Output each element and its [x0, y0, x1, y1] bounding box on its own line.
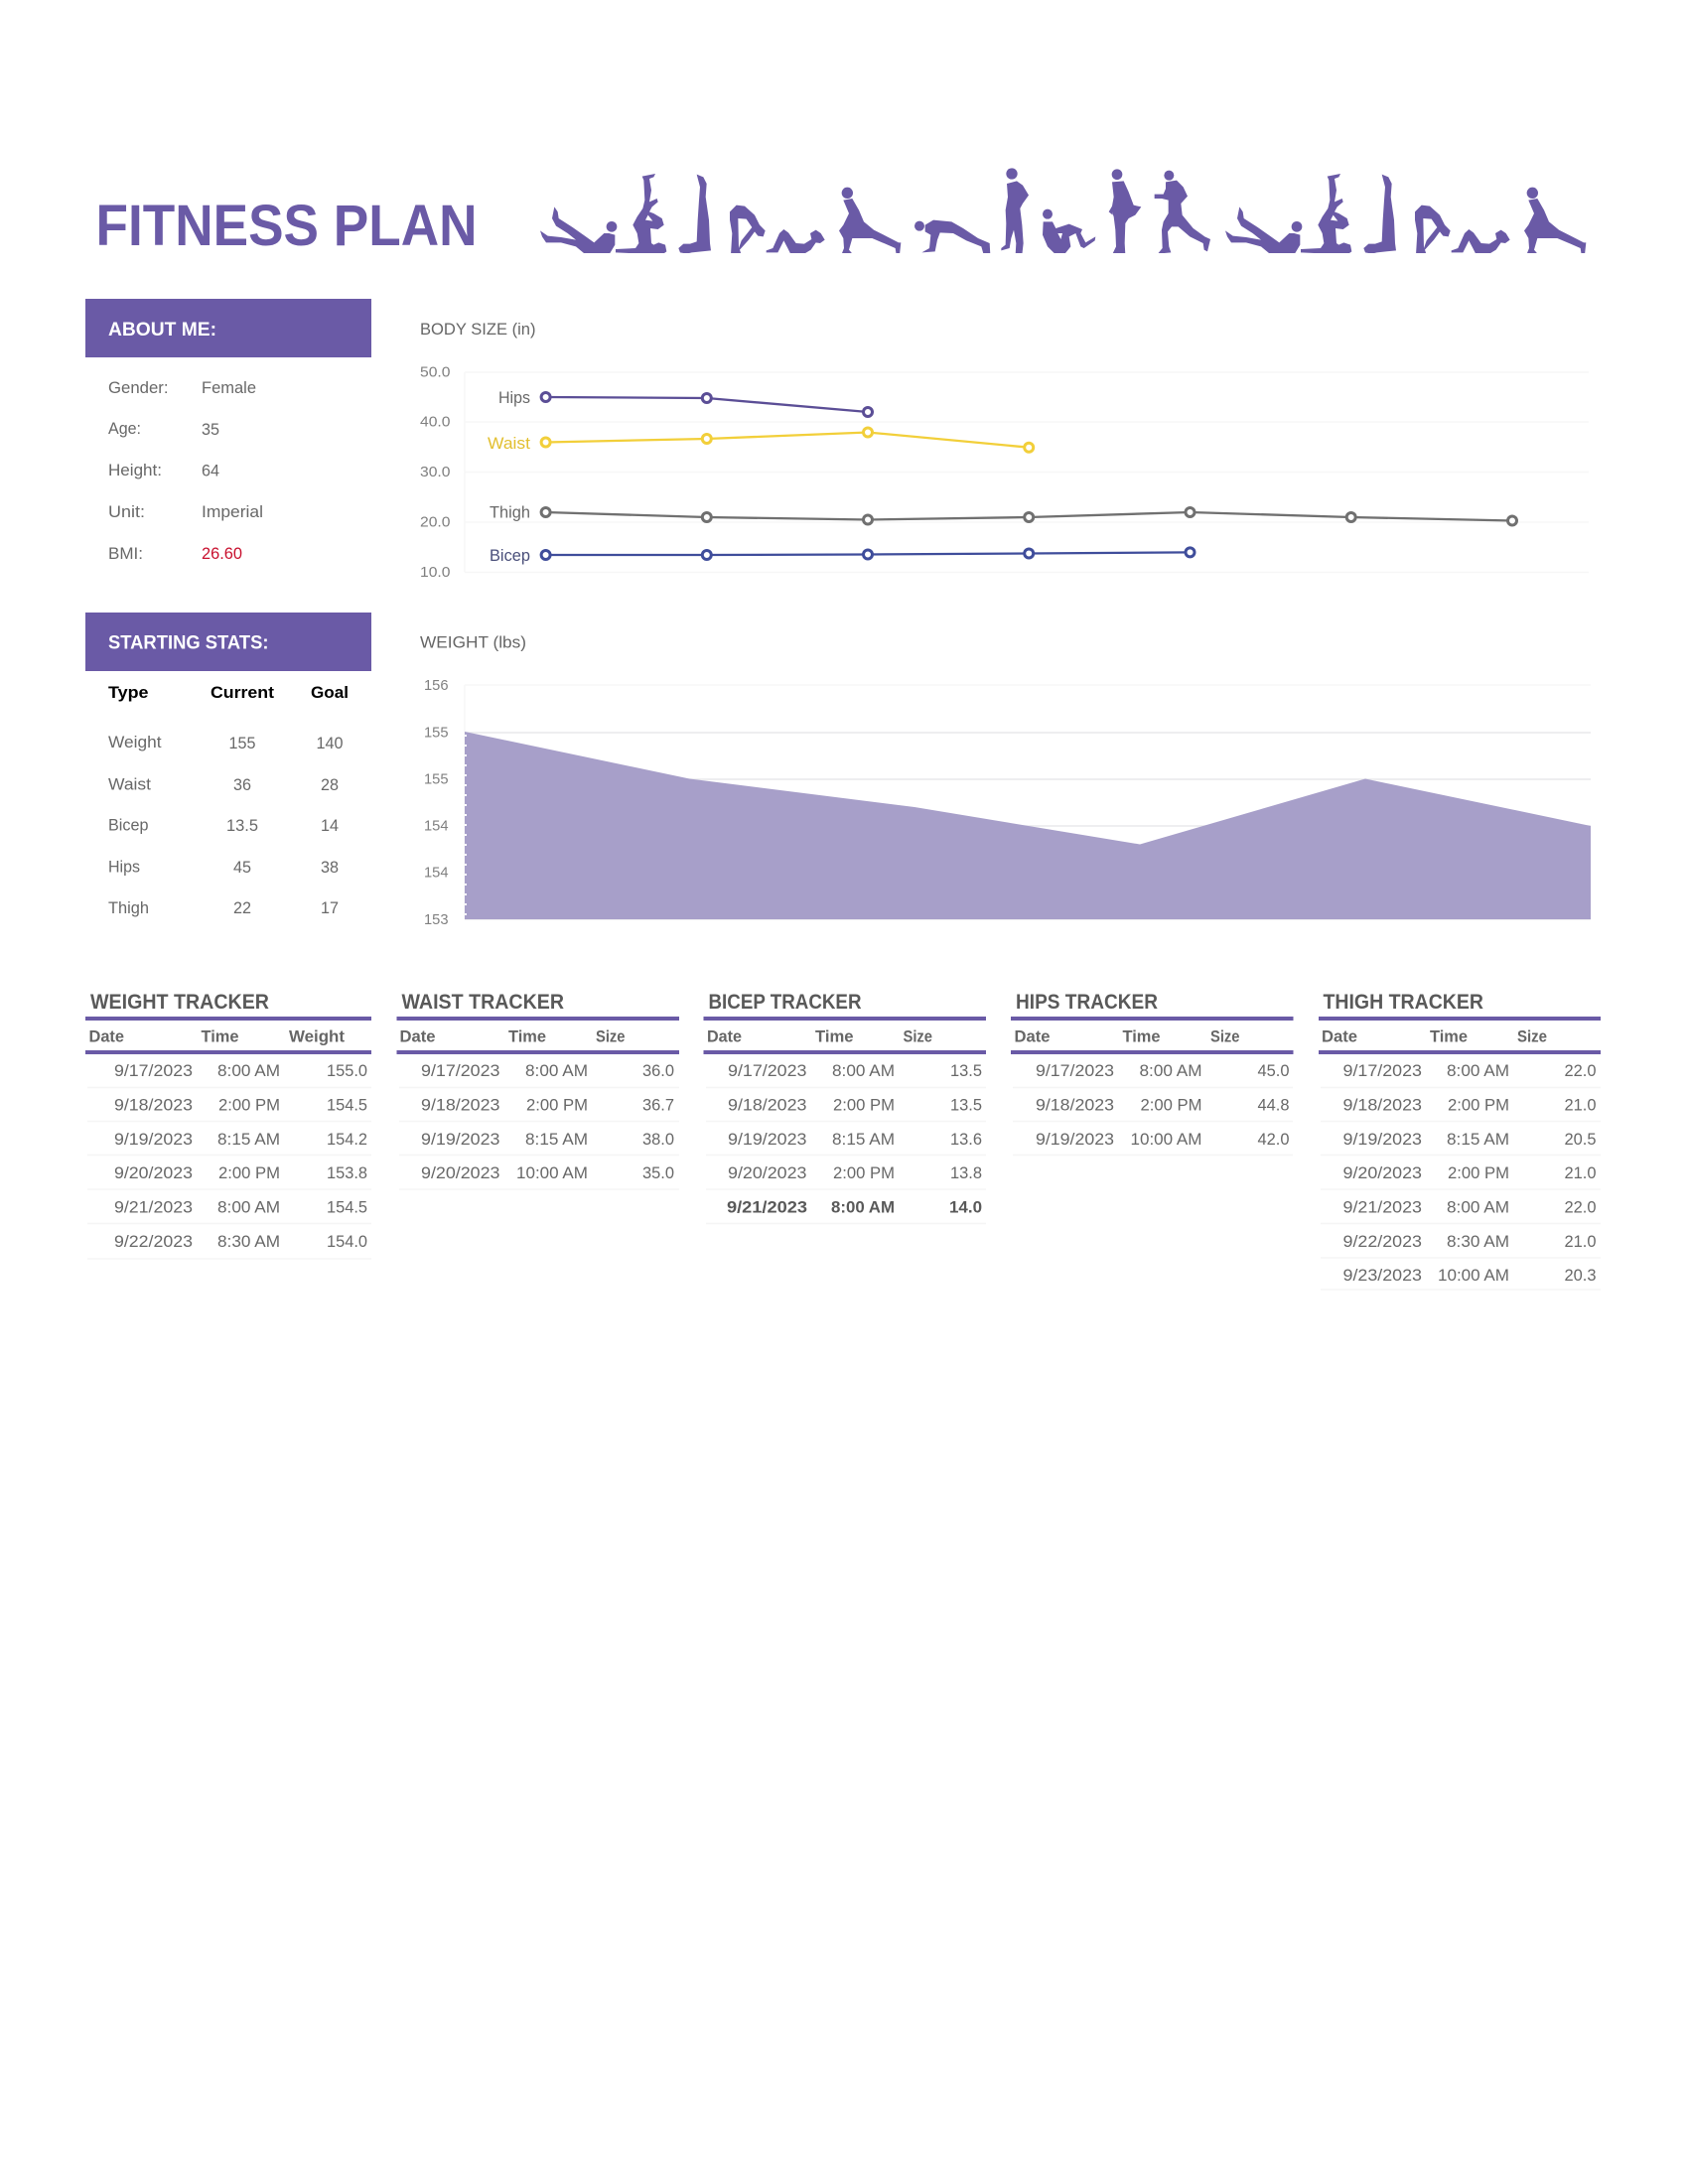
series: waist	[488, 428, 1034, 453]
y axis labels: 153	[424, 911, 449, 928]
stats table: 28	[321, 776, 339, 794]
profile details: Unit:	[108, 503, 145, 521]
y axis labels: 50.0	[420, 363, 451, 381]
tracker rows: 9/19/2023	[1036, 1131, 1114, 1149]
series: thigh: Thigh	[490, 504, 530, 522]
stats table: 38	[321, 859, 339, 877]
tracker rows: 20.3	[1565, 1267, 1597, 1285]
panel: thigh tracker	[1319, 991, 1601, 1290]
tracker rows: 9/19/2023	[114, 1131, 193, 1149]
tracker rows: 44.8	[1257, 1096, 1289, 1114]
profile details: Height:	[108, 462, 162, 479]
stats table: Type	[108, 684, 149, 702]
y axis labels	[424, 677, 449, 928]
tracker header row: Size	[1210, 1028, 1239, 1046]
tracker header row	[703, 1017, 986, 1054]
tracker rows: 21.0	[1565, 1164, 1597, 1182]
tracker rows: 9/18/2023	[728, 1096, 806, 1114]
profile details: Age:	[108, 420, 141, 438]
tracker rows: 8:00 AM	[1447, 1062, 1509, 1080]
tracker rows: 8:30 AM	[1447, 1233, 1509, 1251]
tracker title: HIPS TRACKER	[1016, 991, 1158, 1014]
y axis labels: 10.0	[420, 564, 451, 581]
tracker rows: 22.0	[1565, 1062, 1597, 1080]
panel: hips tracker	[1011, 991, 1293, 1156]
tracker rows: 9/22/2023	[114, 1233, 193, 1251]
y axis labels	[420, 363, 451, 581]
tracker rows: 9/20/2023	[1342, 1164, 1422, 1182]
weight area	[465, 732, 1591, 919]
tracker rows: 2:00 PM	[218, 1096, 280, 1114]
tracker rows: 20.5	[1565, 1131, 1597, 1149]
tracker rows: 8:00 AM	[832, 1062, 895, 1080]
tracker rows	[1013, 1062, 1293, 1156]
y axis labels: 154	[424, 818, 449, 834]
y axis labels: 154	[424, 864, 449, 882]
tracker header row: Time	[1430, 1028, 1468, 1046]
tracker rows: 9/22/2023	[1342, 1233, 1422, 1251]
tracker rows: 9/17/2023	[1036, 1062, 1114, 1080]
y axis labels: 155	[424, 725, 449, 741]
stats table: Thigh	[108, 899, 149, 917]
tracker rows: 42.0	[1257, 1131, 1289, 1149]
stats table: 155	[228, 735, 256, 752]
stats table: 45	[233, 859, 251, 877]
tracker rows: 10:00 AM	[1438, 1267, 1509, 1285]
series: hips: Hips	[498, 389, 530, 407]
tracker rows: 155.0	[327, 1062, 367, 1080]
tracker rows: 8:15 AM	[217, 1131, 280, 1149]
tracker rows: 9/17/2023	[421, 1062, 500, 1080]
profile details: 35	[202, 421, 219, 439]
stats table	[108, 684, 349, 917]
icon: middle poses	[914, 168, 1210, 255]
tracker rows: 8:00 AM	[217, 1062, 280, 1080]
profile details: 64	[202, 463, 219, 480]
stats table: Hips	[108, 858, 140, 876]
y axis labels: 30.0	[420, 464, 451, 480]
tracker rows: 9/21/2023	[114, 1199, 193, 1217]
tracker rows: 9/18/2023	[1342, 1096, 1422, 1114]
series: bicep	[490, 547, 1195, 565]
tracker rows: 10:00 AM	[516, 1164, 588, 1182]
tracker rows: 9/18/2023	[114, 1096, 193, 1114]
tracker rows: 2:00 PM	[833, 1096, 895, 1114]
tracker header row: Time	[1122, 1028, 1160, 1046]
tracker header row	[1319, 1017, 1601, 1054]
tracker header row: Date	[89, 1028, 124, 1046]
tracker rows	[399, 1062, 679, 1189]
tracker rows: 8:00 AM	[1140, 1062, 1201, 1080]
panel: weight tracker	[85, 991, 371, 1259]
tracker rows: 8:15 AM	[832, 1131, 895, 1149]
stats table: 14	[321, 817, 339, 835]
profile details: BMI:	[108, 545, 143, 563]
tracker rows: 9/17/2023	[1342, 1062, 1422, 1080]
tracker header row	[1011, 1017, 1293, 1054]
tracker header row: Size	[1517, 1028, 1547, 1046]
tracker rows: 8:30 AM	[217, 1233, 280, 1251]
tracker rows: 9/18/2023	[1036, 1096, 1114, 1114]
stats table: Waist	[108, 776, 151, 794]
tracker header row: Date	[399, 1028, 435, 1046]
panel: waist tracker	[397, 991, 679, 1189]
profile details: Gender:	[108, 379, 169, 397]
title: FITNESS PLAN	[95, 194, 477, 258]
tracker rows: 9/21/2023	[727, 1199, 807, 1217]
heading: body size: BODY SIZE (in)	[420, 320, 536, 339]
panel: bicep tracker	[703, 991, 986, 1223]
tracker title: WAIST TRACKER	[401, 991, 564, 1014]
heading: starting stats: STARTING STATS:	[108, 631, 268, 653]
tracker header row	[397, 1017, 679, 1054]
icon: first pose set	[540, 174, 901, 255]
tracker rows: 9/19/2023	[1342, 1131, 1422, 1149]
series: bicep: Bicep	[490, 547, 530, 565]
tracker header row: Time	[201, 1028, 238, 1046]
tracker rows: 2:00 PM	[833, 1164, 895, 1182]
heading: starting stats	[85, 613, 371, 671]
profile details: 26.60	[202, 545, 242, 563]
stats table: Current	[211, 684, 275, 702]
tracker title: THIGH TRACKER	[1323, 991, 1483, 1014]
tracker rows: 9/19/2023	[728, 1131, 806, 1149]
tracker title: BICEP TRACKER	[709, 991, 862, 1014]
chart: body size line chart	[420, 320, 1589, 581]
series: thigh	[490, 504, 1517, 525]
heading: weight: WEIGHT (lbs)	[420, 633, 526, 651]
tracker rows: 36.0	[642, 1062, 674, 1080]
tracker rows: 2:00 PM	[1448, 1096, 1509, 1114]
stats table: 22	[233, 899, 251, 917]
tracker rows: 9/20/2023	[728, 1164, 806, 1182]
tracker rows: 9/18/2023	[421, 1096, 500, 1114]
tracker rows: 153.8	[327, 1164, 367, 1182]
tracker rows: 13.5	[950, 1062, 982, 1080]
y axis labels: 156	[424, 677, 449, 694]
tracker title: WEIGHT TRACKER	[90, 991, 269, 1014]
tracker rows: 9/21/2023	[1342, 1199, 1422, 1217]
series: hips	[498, 389, 872, 417]
tracker rows	[87, 1062, 371, 1259]
tracker rows: 13.6	[950, 1131, 982, 1149]
tracker header row: Size	[904, 1028, 932, 1046]
tracker header row	[85, 1017, 371, 1054]
tracker rows: 35.0	[642, 1164, 674, 1182]
stats table: 36	[233, 776, 251, 794]
panel: starting stats	[85, 613, 371, 917]
stats table: Bicep	[108, 816, 149, 834]
tracker header row: Date	[1322, 1028, 1357, 1046]
tracker rows: 8:00 AM	[831, 1199, 895, 1217]
profile details: Female	[202, 379, 256, 397]
y axis labels: 20.0	[420, 514, 451, 530]
tracker rows	[706, 1062, 986, 1223]
tracker rows: 21.0	[1565, 1233, 1597, 1251]
profile details: Imperial	[202, 503, 263, 521]
profile details	[108, 379, 263, 563]
tracker rows: 8:00 AM	[217, 1199, 280, 1217]
stats table: 140	[316, 735, 344, 752]
tracker rows: 13.5	[950, 1096, 982, 1114]
tracker rows: 13.8	[950, 1164, 982, 1182]
tracker rows: 154.5	[327, 1096, 367, 1114]
stats table: 13.5	[226, 817, 258, 835]
tracker rows: 36.7	[642, 1096, 674, 1114]
tracker rows: 8:15 AM	[1447, 1131, 1509, 1149]
tracker rows	[1321, 1062, 1601, 1290]
tracker header row: Size	[596, 1028, 626, 1046]
tracker rows: 2:00 PM	[218, 1164, 280, 1182]
icon: repeated pose set	[1225, 174, 1586, 255]
tracker rows: 154.2	[327, 1131, 367, 1149]
y axis labels: 155	[424, 770, 449, 788]
tracker rows: 9/20/2023	[421, 1164, 500, 1182]
tracker header row: Time	[508, 1028, 546, 1046]
panel: about me	[85, 299, 371, 563]
icon: exercise silhouettes banner	[540, 168, 1586, 255]
heading: about me	[85, 299, 371, 357]
tracker rows: 9/20/2023	[114, 1164, 193, 1182]
stats table: Goal	[311, 684, 349, 702]
tracker header row: Weight	[289, 1028, 346, 1046]
tracker rows: 10:00 AM	[1130, 1131, 1201, 1149]
tracker rows: 8:00 AM	[1447, 1199, 1509, 1217]
tracker rows: 9/19/2023	[421, 1131, 500, 1149]
tracker rows: 14.0	[949, 1199, 982, 1217]
heading: about me: ABOUT ME:	[108, 319, 216, 341]
tracker rows: 22.0	[1565, 1199, 1597, 1217]
tracker rows: 2:00 PM	[1448, 1164, 1509, 1182]
tracker rows: 9/17/2023	[114, 1062, 193, 1080]
tracker rows: 9/17/2023	[728, 1062, 806, 1080]
tracker rows: 21.0	[1565, 1096, 1597, 1114]
tracker rows: 8:00 AM	[525, 1062, 588, 1080]
tracker rows: 2:00 PM	[1140, 1096, 1201, 1114]
tracker rows: 154.5	[327, 1199, 367, 1217]
y axis labels: 40.0	[420, 413, 451, 431]
tracker rows: 9/23/2023	[1342, 1267, 1422, 1285]
series: waist: Waist	[488, 435, 530, 453]
chart: weight area chart	[420, 633, 1591, 928]
tracker header row: Time	[815, 1028, 854, 1046]
tracker header row: Date	[1015, 1028, 1051, 1046]
tracker rows: 45.0	[1257, 1062, 1289, 1080]
tracker rows: 38.0	[642, 1131, 674, 1149]
stats table: 17	[321, 899, 339, 917]
tracker rows: 2:00 PM	[526, 1096, 588, 1114]
tracker rows: 154.0	[327, 1233, 367, 1251]
tracker rows: 8:15 AM	[525, 1131, 588, 1149]
stats table: Weight	[108, 734, 162, 751]
tracker header row: Date	[707, 1028, 742, 1046]
